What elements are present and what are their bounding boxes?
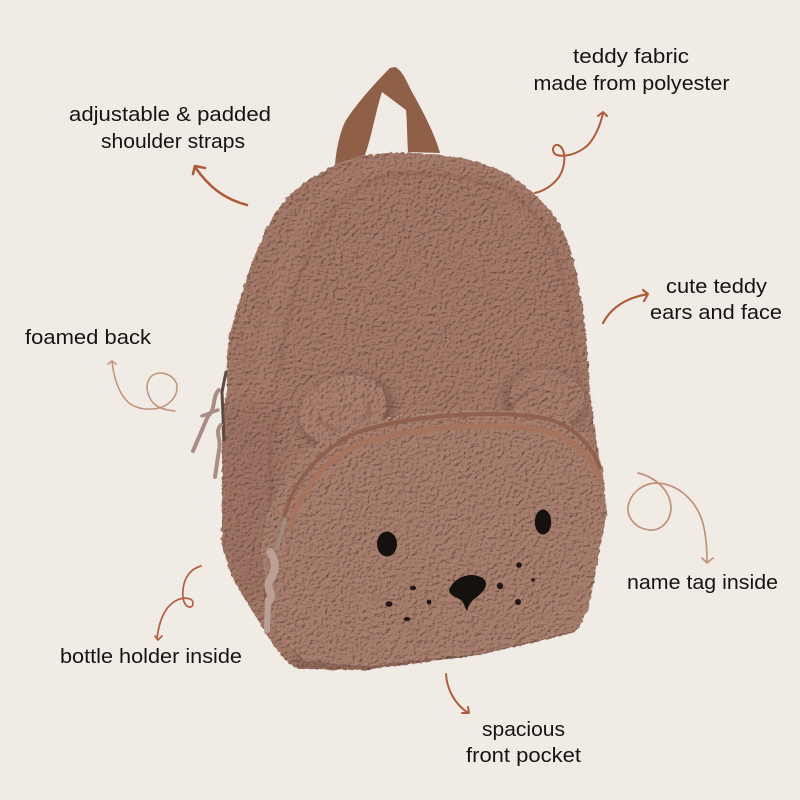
left ear — [291, 365, 395, 455]
label: adjustable and padded shoulder straps: shoulder straps — [101, 130, 245, 153]
arrow: shoulder straps — [193, 166, 247, 205]
front pocket — [262, 411, 607, 666]
nose — [449, 575, 486, 611]
carry handle — [335, 67, 440, 165]
label: foamed back: foamed back — [25, 326, 152, 349]
zipper pull: front pocket — [267, 520, 285, 630]
arrow: teddy fabric — [535, 112, 607, 193]
label: spacious front pocket — [466, 718, 581, 767]
body shading — [222, 160, 590, 690]
pocket zipper — [284, 414, 601, 529]
label: cute teddy ears and face — [650, 275, 782, 324]
zipper pulls: side — [193, 372, 226, 477]
arrow: cute teddy ears — [603, 290, 648, 323]
right ear shadow — [500, 366, 590, 438]
label: adjustable and padded shoulder straps: adjustable & padded — [69, 103, 271, 126]
label: adjustable and padded shoulder straps — [69, 103, 271, 153]
arrow: spacious pocket — [446, 674, 469, 713]
backpack illustration — [193, 67, 607, 690]
arrow: bottle holder — [155, 566, 201, 640]
label: name tag inside: name tag inside — [627, 571, 778, 594]
arrow: name tag — [628, 473, 713, 563]
left ear shadow — [290, 365, 404, 463]
left eye — [377, 532, 397, 556]
label: spacious front pocket: spacious — [482, 718, 565, 741]
label: bottle holder inside: bottle holder inside — [60, 645, 242, 668]
right ear — [506, 365, 588, 431]
right eye — [535, 510, 551, 534]
whisker dots — [386, 562, 535, 621]
label: teddy fabric: teddy fabric — [573, 45, 689, 68]
arrow: foamed back — [108, 361, 177, 411]
label: cute teddy ears and face: ears and face — [650, 301, 782, 324]
label: teddy fabric: made from polyester — [534, 72, 730, 95]
label: cute teddy ears and face: cute teddy — [666, 275, 768, 298]
label: teddy fabric — [534, 45, 730, 95]
bear face — [377, 510, 551, 621]
main body — [222, 153, 607, 670]
label: spacious front pocket: front pocket — [466, 744, 581, 767]
